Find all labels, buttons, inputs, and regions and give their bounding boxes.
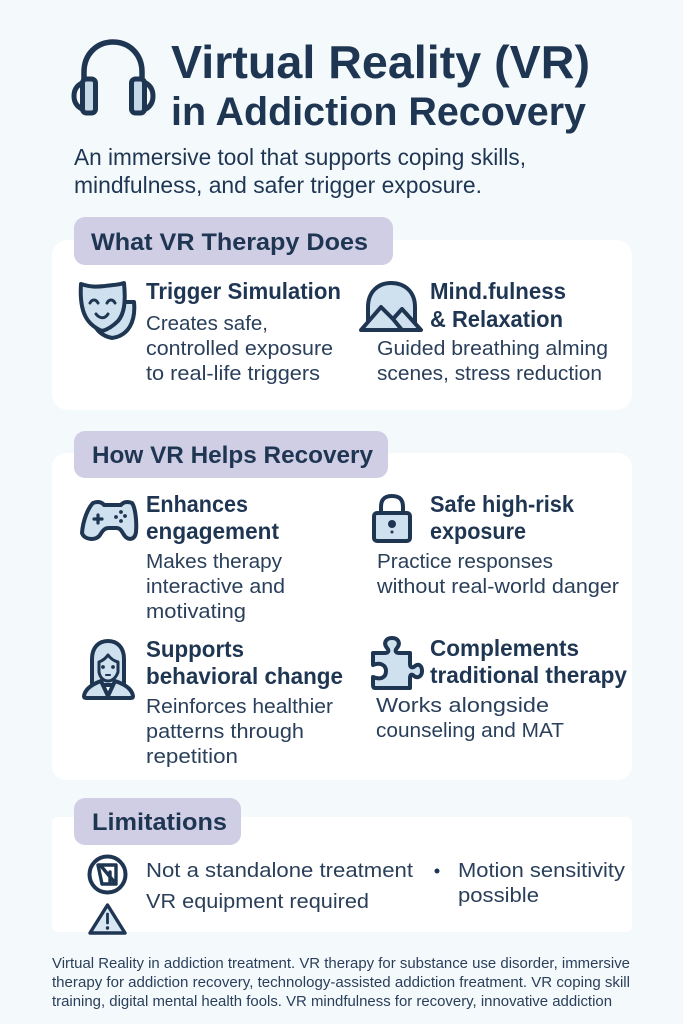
heading: How VR Helps Recovery: [74, 431, 388, 478]
text: Complements traditional therapy: traditional therapy: [430, 662, 627, 688]
heading: Limitations: [74, 798, 241, 845]
icon: theatre mask: [81, 283, 134, 338]
heading: What VR Therapy Does: [74, 217, 393, 265]
icon: puzzle piece: [373, 638, 422, 688]
text: Mindfulness and Relaxation: Mind.fulness: [430, 278, 566, 304]
text: motion sensitivity: Motion sensitivity: [458, 859, 626, 882]
text: Mindfulness and Relaxation: Guided breathing alming: [377, 337, 608, 360]
text: limitations left: [146, 859, 413, 913]
text: Safe high-risk exposure: without real-world danger: [376, 575, 619, 598]
text: Trigger Simulation: [146, 278, 341, 385]
icon: padlock: [374, 496, 410, 541]
text: Enhances engagement: motivating: [146, 600, 246, 623]
heading: What VR Therapy Does: What VR Therapy Does: [91, 229, 368, 256]
text: Complements traditional therapy: Works alongside: [376, 694, 549, 717]
icon: headphones: [74, 42, 153, 113]
text: Enhances engagement: [146, 491, 285, 623]
text: Supports behavioral change: Reinforces healthier: [146, 695, 333, 718]
text: Enhances engagement: Enhances: [146, 491, 248, 517]
text: Safe high-risk exposure: Practice responses: [377, 550, 553, 573]
text: limitations left: Not a standalone treatment: [146, 859, 413, 882]
text: Enhances engagement: engagement: [146, 518, 279, 544]
text: Trigger Simulation: to real-life triggers: [146, 362, 320, 385]
title: Virtual Reality (VR): [171, 36, 590, 88]
text: motion sensitivity: possible: [458, 884, 539, 907]
text: Mindfulness and Relaxation: scenes, stress reduction: [377, 362, 602, 385]
text: Trigger Simulation: controlled exposure: [146, 337, 333, 360]
icon: prohibited box: [90, 856, 126, 892]
text: Enhances engagement: Makes therapy: [146, 550, 283, 573]
text: Mindfulness and Relaxation: & Relaxation: [430, 306, 563, 332]
text: Enhances engagement: interactive and: [146, 575, 285, 598]
text: Safe high-risk exposure: [376, 491, 619, 598]
subtitle: [74, 144, 526, 198]
icon: person: [84, 641, 133, 698]
panel: Limitations: [52, 798, 632, 933]
panel: How VR Helps Recovery: [52, 431, 632, 780]
text: Complements traditional therapy: Complements: [430, 635, 579, 661]
heading: How VR Helps Recovery: How VR Helps Recovery: [92, 442, 374, 469]
text: Safe high-risk exposure: Safe high-risk: [430, 491, 574, 517]
text: Trigger Simulation: Trigger Simulation: [146, 278, 341, 304]
footer text: therapy for addiction recovery, technology-assisted addiction freatment. VR coping skill: [52, 975, 630, 991]
title: [171, 36, 590, 134]
text: Complements traditional therapy: counseling and MAT: [376, 719, 564, 742]
text: Supports behavioral change: [146, 636, 343, 768]
icon: mountain scene: [361, 283, 421, 330]
subtitle: An immersive tool that supports coping skills,: [74, 144, 526, 170]
icon: warning triangle: [90, 905, 125, 933]
text: Complements traditional therapy: [376, 635, 627, 742]
icon: game controller: [82, 502, 136, 539]
text: Supports behavioral change: Supports: [146, 636, 244, 662]
footer text: Virtual Reality in addiction treatment. VR therapy for substance use disorder, immersive: [52, 956, 630, 972]
text: Mindfulness and Relaxation: [377, 278, 608, 385]
footer text: training, digital mental health fools. VR mindfulness for recovery, innovative addiction: [52, 994, 612, 1010]
text: Supports behavioral change: repetition: [146, 745, 238, 768]
text: Safe high-risk exposure: exposure: [430, 518, 526, 544]
text: motion sensitivity: [458, 859, 626, 907]
heading: Limitations: Limitations: [92, 809, 227, 836]
text: Trigger Simulation: Creates safe,: [146, 312, 268, 335]
text: limitations left: VR equipment required: [146, 890, 369, 913]
title: in Addiction Recovery: [171, 90, 587, 134]
subtitle: mindfulness, and safer trigger exposure.: [74, 172, 482, 198]
panel: What VR Therapy Does: [52, 217, 632, 410]
text: Supports behavioral change: patterns through: [146, 720, 304, 743]
footer text: [52, 956, 630, 1010]
text: Supports behavioral change: behavioral change: [146, 663, 343, 689]
bullet dot: [434, 868, 440, 874]
